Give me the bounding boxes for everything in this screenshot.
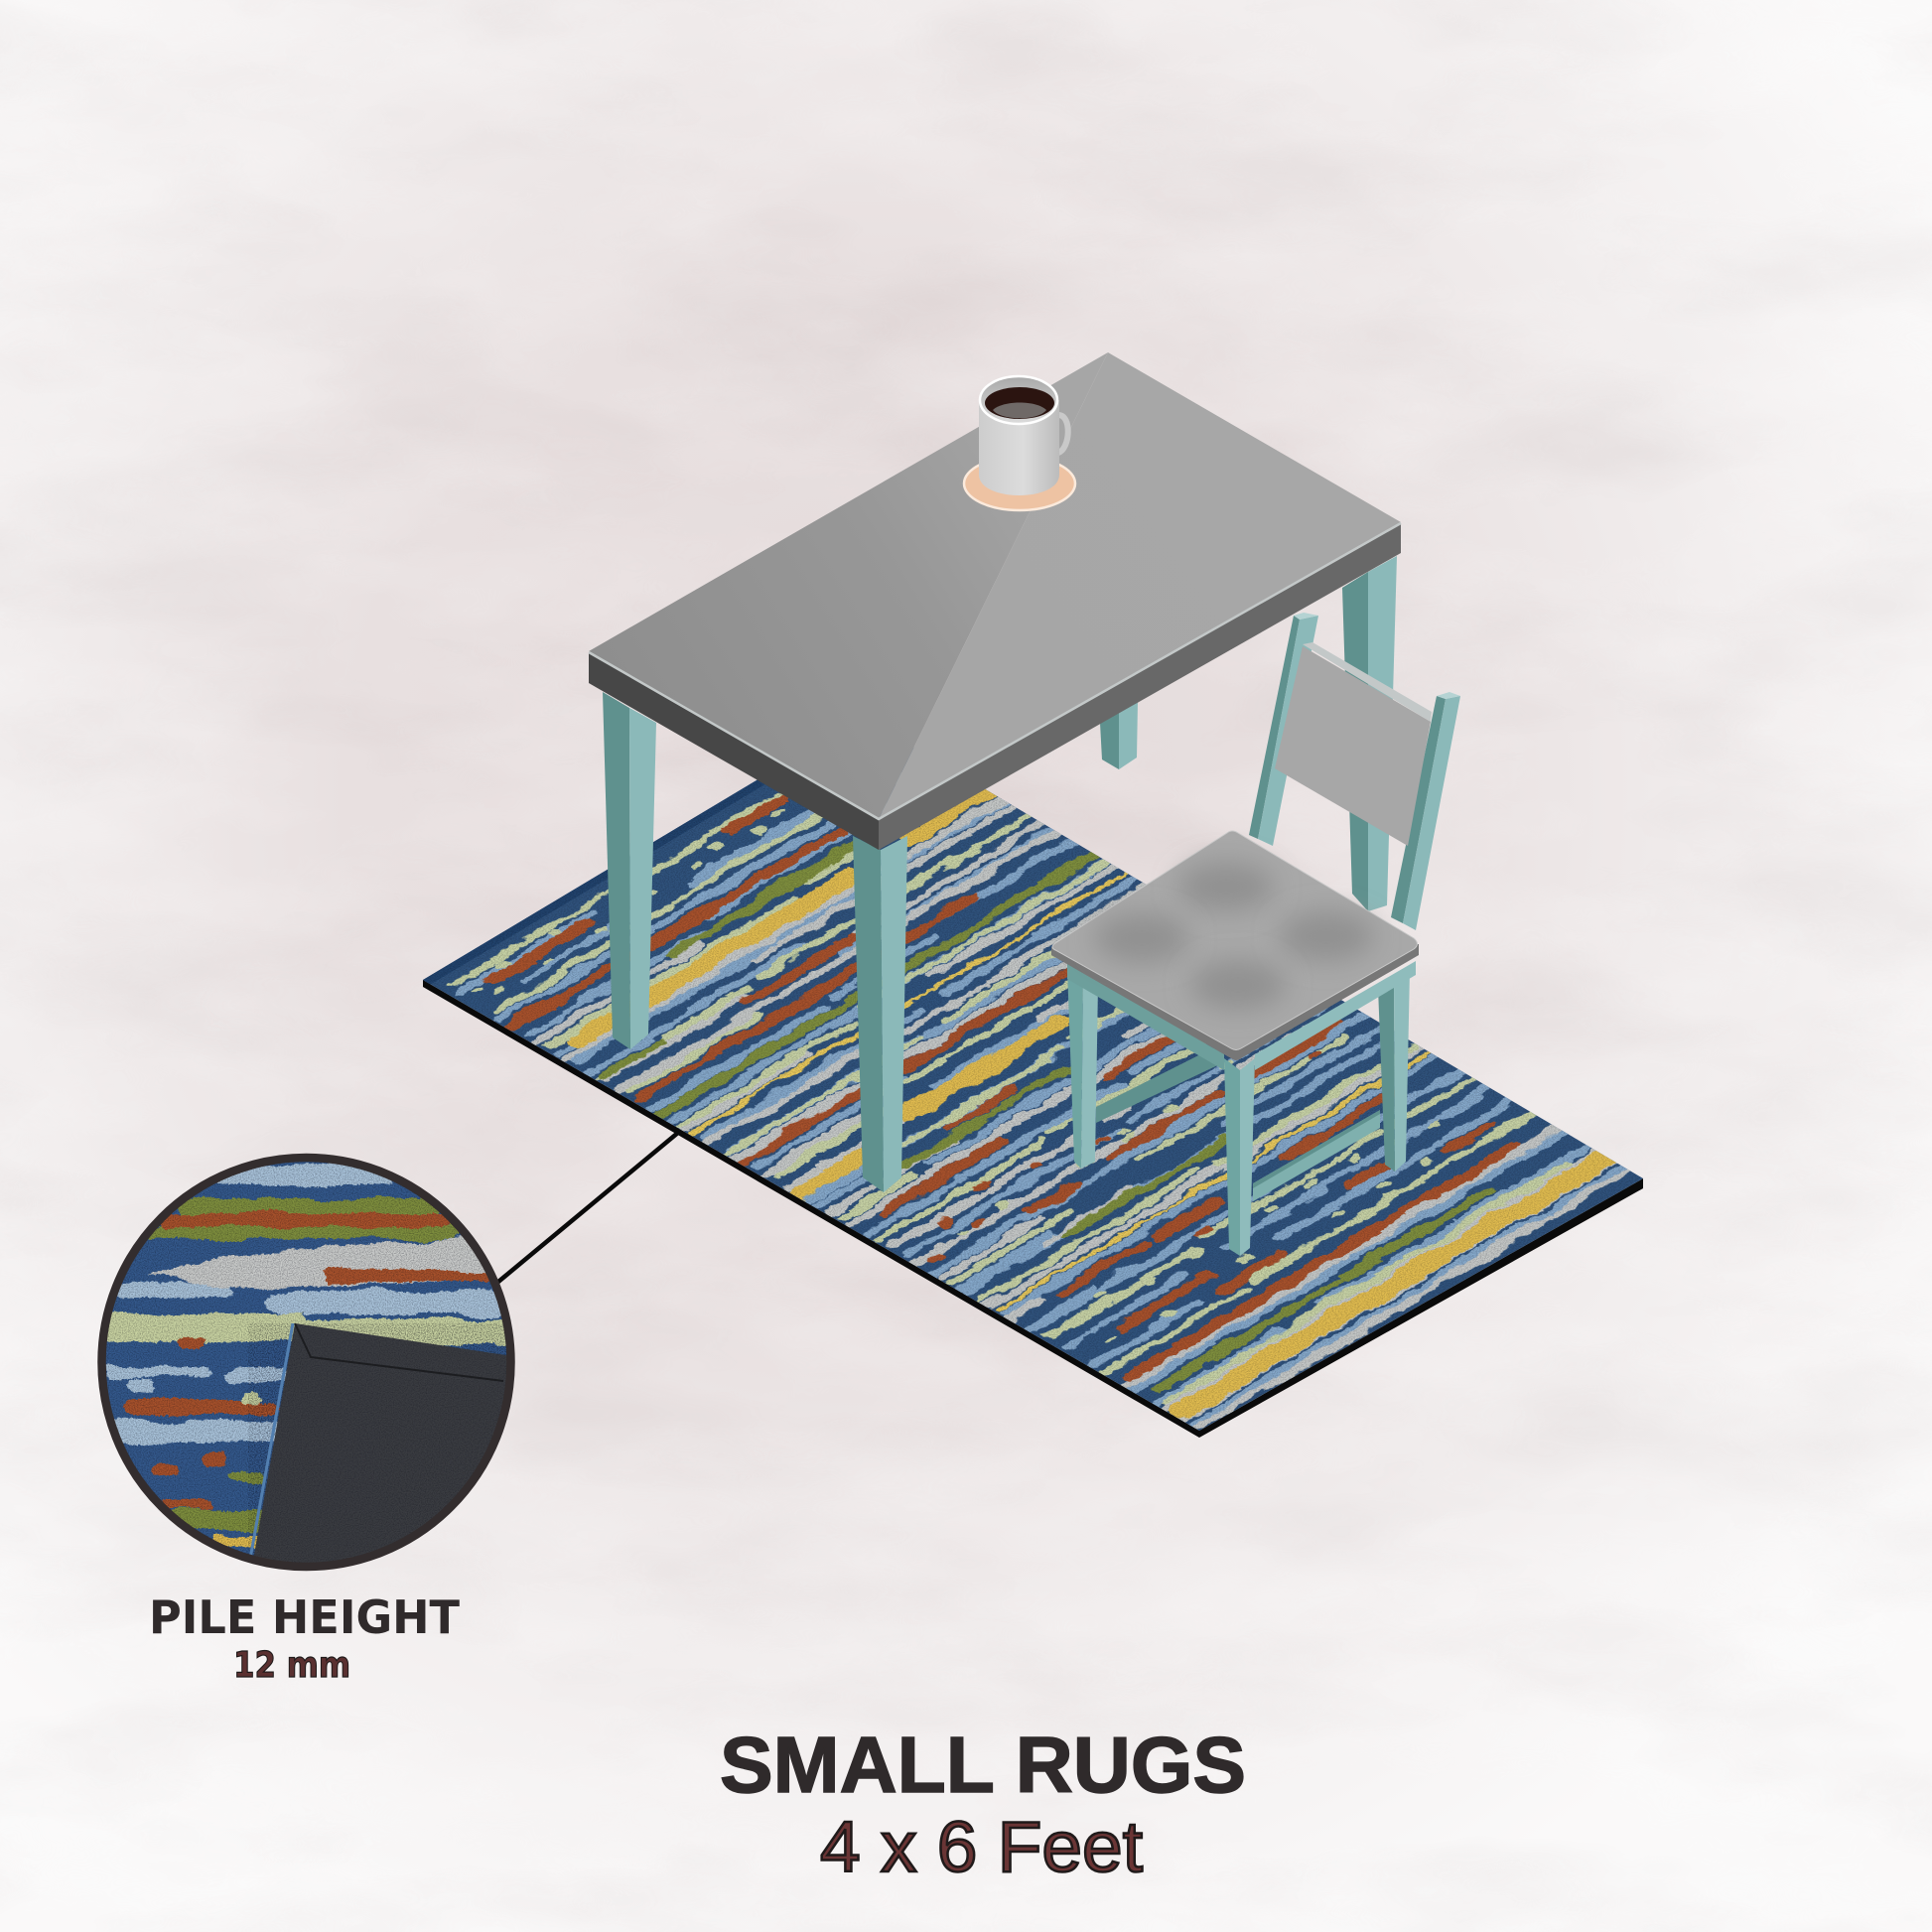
magnified circle: pile close-up and rug backing (94, 1147, 526, 1588)
chair seat with cushion dimples (1052, 831, 1418, 1050)
coffee mug on coaster (964, 376, 1075, 510)
chair back panel (1275, 642, 1432, 846)
mug handle (1058, 415, 1068, 453)
chair stretchers (1096, 1042, 1380, 1201)
coffee (985, 387, 1054, 419)
chair leg: right (1378, 969, 1410, 1172)
chair leg: front (1224, 1058, 1255, 1256)
chair (1051, 613, 1460, 1256)
pile height label: 12 mm (233, 1645, 350, 1686)
chair seat edge (1051, 944, 1419, 1060)
pile height label (149, 1590, 461, 1686)
title: Small Rugs: SMALL RUGS (720, 1721, 1246, 1809)
callout line from rug edge to magnified circle (492, 1132, 679, 1287)
table edge: front-left face (589, 653, 879, 850)
table edge: front-right face (879, 524, 1401, 850)
chair apron (1067, 961, 1416, 1070)
rug backing flap (248, 1322, 506, 1563)
coaster (964, 457, 1075, 510)
mug rim (980, 376, 1057, 424)
mug body (979, 400, 1059, 495)
table leg: back stub (1100, 701, 1138, 769)
table leg: front (853, 836, 907, 1192)
subtitle: dimensions: 4 x 6 Feet (820, 1808, 1143, 1887)
table (589, 352, 1401, 1192)
pile height label: PILE HEIGHT (149, 1590, 461, 1644)
chair back post: right (1391, 692, 1460, 930)
table leg: left (603, 692, 656, 1049)
table top surface (589, 352, 1401, 819)
table leg: right (1342, 556, 1397, 911)
rug: striped 4 x 6 feet, isometric (423, 747, 1643, 1438)
chair leg: left (1067, 968, 1098, 1169)
chair back post: left (1249, 613, 1318, 846)
